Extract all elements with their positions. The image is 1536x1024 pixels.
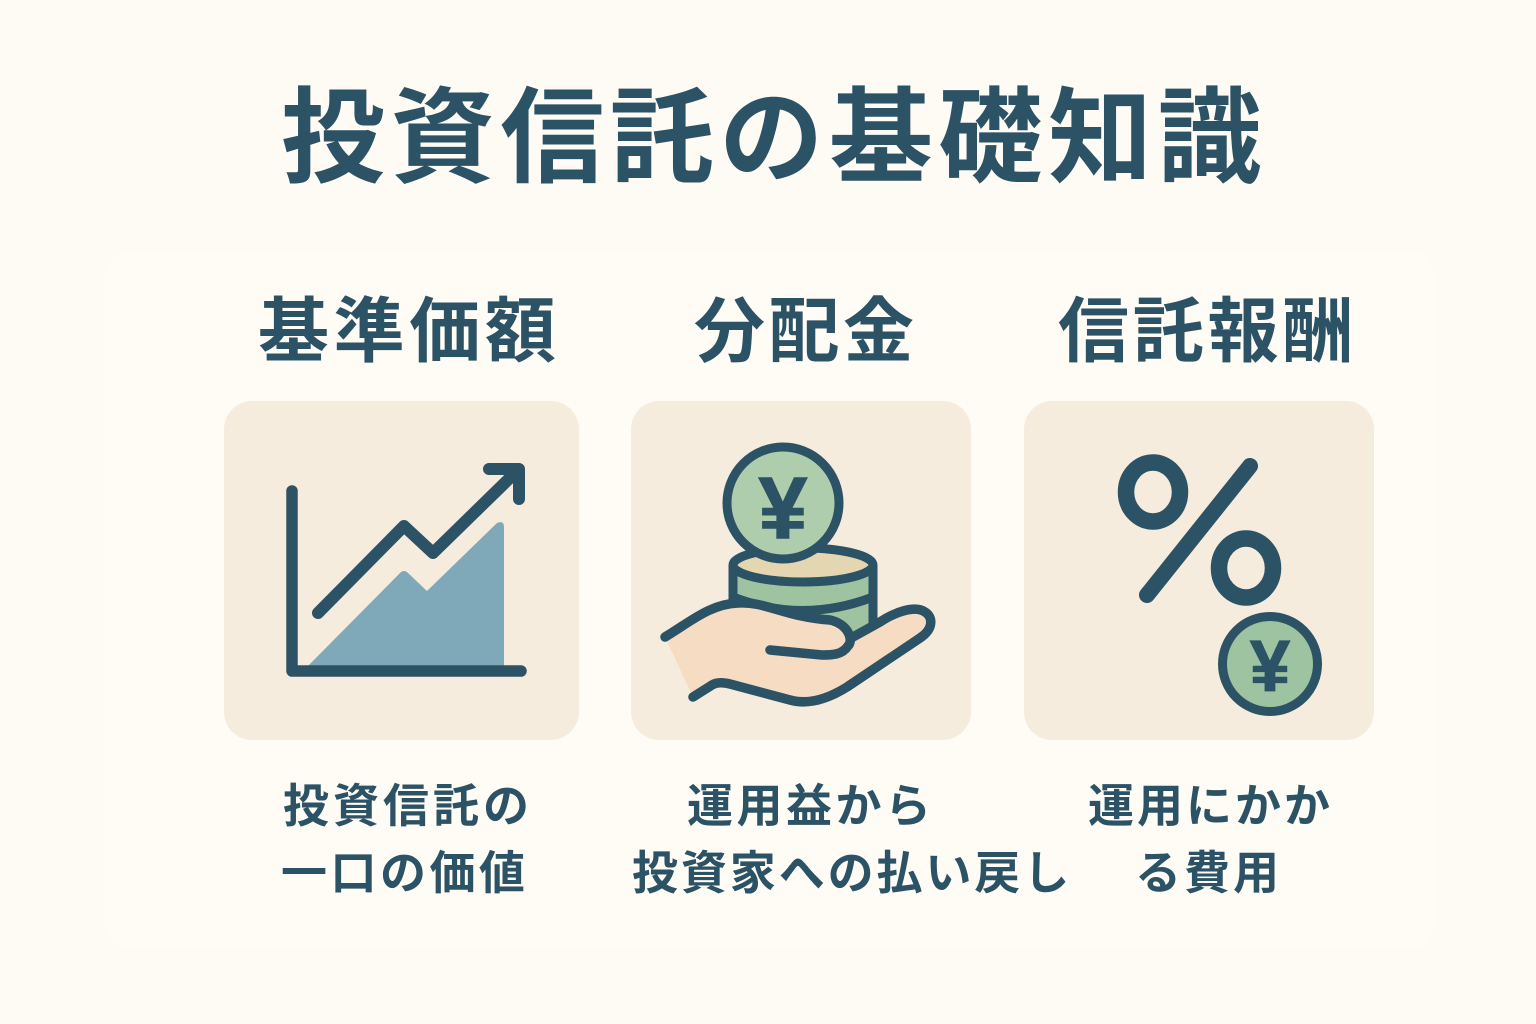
description: 信託報酬: る費用 (1135, 847, 1282, 899)
icon: coins on a hand (665, 447, 931, 703)
panel: 信託報酬 (1024, 293, 1374, 899)
icon: percent sign (1126, 462, 1273, 598)
description: 基準価額: 一口の価値 (281, 847, 528, 899)
icon: rising chart (292, 469, 521, 671)
heading: 信託報酬: 信託報酬 (1058, 293, 1357, 372)
description: 基準価額 (281, 780, 533, 899)
description: 分配金 (632, 780, 1072, 899)
icon: small yen coin: ¥ (1250, 627, 1290, 707)
icon: yen coin (727, 447, 839, 559)
description: 分配金: 運用益から (687, 780, 934, 832)
card: chart background (224, 401, 579, 740)
card: percent background (1024, 401, 1374, 740)
title: 投資信託の基礎知識 (281, 81, 1267, 197)
description: 信託報酬 (1088, 780, 1333, 899)
description: 信託報酬: 運用にかか (1088, 780, 1333, 832)
description: 分配金: 投資家への払い戻し (632, 847, 1072, 899)
card: coin background (631, 401, 971, 740)
description: 基準価額: 投資信託の (283, 780, 533, 832)
heading: 基準価額: 基準価額 (258, 293, 560, 372)
icon: yen coin: ¥ (759, 460, 807, 557)
icon: small yen coin (1222, 616, 1318, 712)
heading: 分配金: 分配金 (694, 293, 918, 372)
panel: 分配金 (631, 293, 1072, 899)
panel: 基準価額 (224, 293, 579, 899)
